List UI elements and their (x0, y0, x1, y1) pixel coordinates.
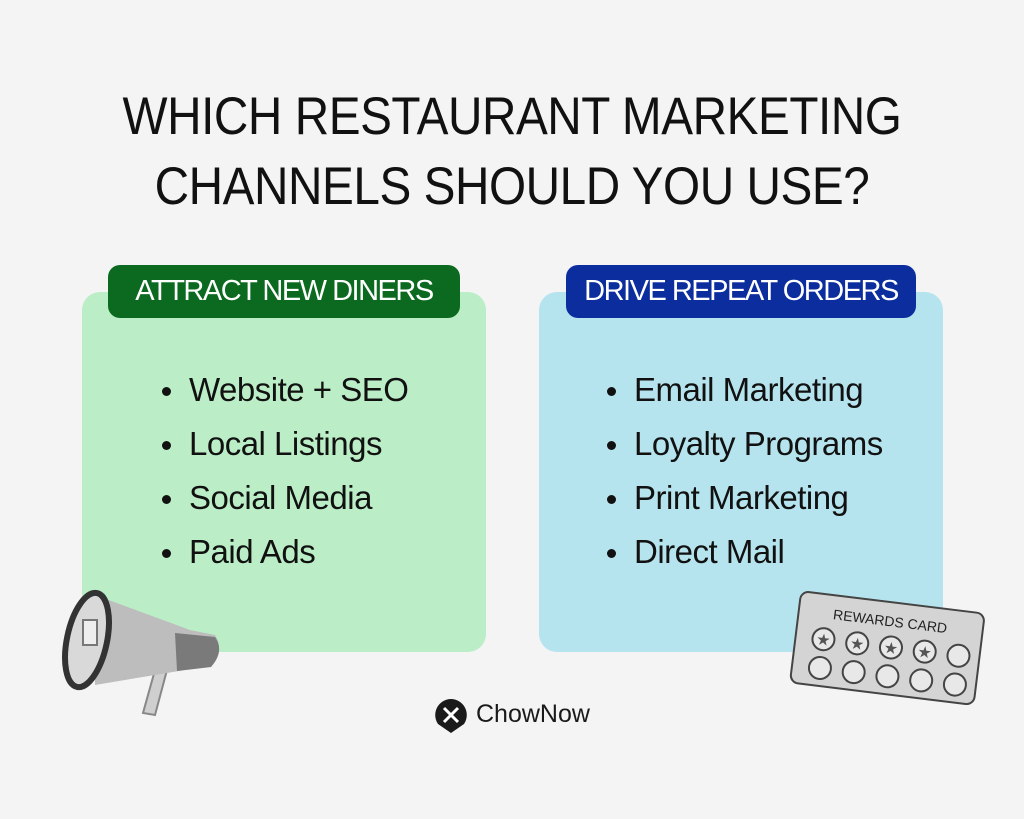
list: repeat channels: Loyalty Programs (634, 425, 883, 462)
icon: rewards card (790, 591, 985, 705)
icon: logo mark (435, 699, 467, 733)
list: attract channels: Website + SEO (189, 371, 408, 408)
logo: ChowNow (435, 699, 590, 733)
heading pill: attract new diners (108, 265, 460, 318)
heading pill: attract new diners: ATTRACT NEW DINERS (135, 275, 433, 307)
icon: rewards card: REWARDS CARD (832, 606, 948, 636)
panel: drive repeat orders (539, 292, 943, 652)
heading pill: drive repeat orders: DRIVE REPEAT ORDERS (584, 275, 898, 307)
title: WHICH RESTAURANT MARKETING (123, 87, 901, 146)
list: repeat channels (607, 371, 883, 570)
icon: megaphone (62, 590, 220, 716)
icon: rewards card: ★ (815, 631, 831, 650)
panel: attract new diners (82, 292, 486, 652)
icon: rewards card: ★ (849, 636, 865, 654)
list: repeat channels: Direct Mail (634, 533, 784, 570)
heading pill: drive repeat orders (566, 265, 916, 318)
list: attract channels (162, 371, 408, 570)
icon: rewards card: ★ (916, 644, 933, 662)
title (122, 87, 901, 216)
title: CHANNELS SHOULD YOU USE? (155, 157, 869, 216)
list: attract channels: Local Listings (189, 425, 382, 462)
list: repeat channels: Print Marketing (634, 479, 848, 516)
list: attract channels: Paid Ads (189, 533, 315, 570)
icon: rewards card: ★ (883, 640, 899, 658)
list: repeat channels: Email Marketing (634, 371, 863, 408)
list: attract channels: Social Media (189, 479, 372, 516)
logo text: ChowNow (476, 700, 590, 728)
